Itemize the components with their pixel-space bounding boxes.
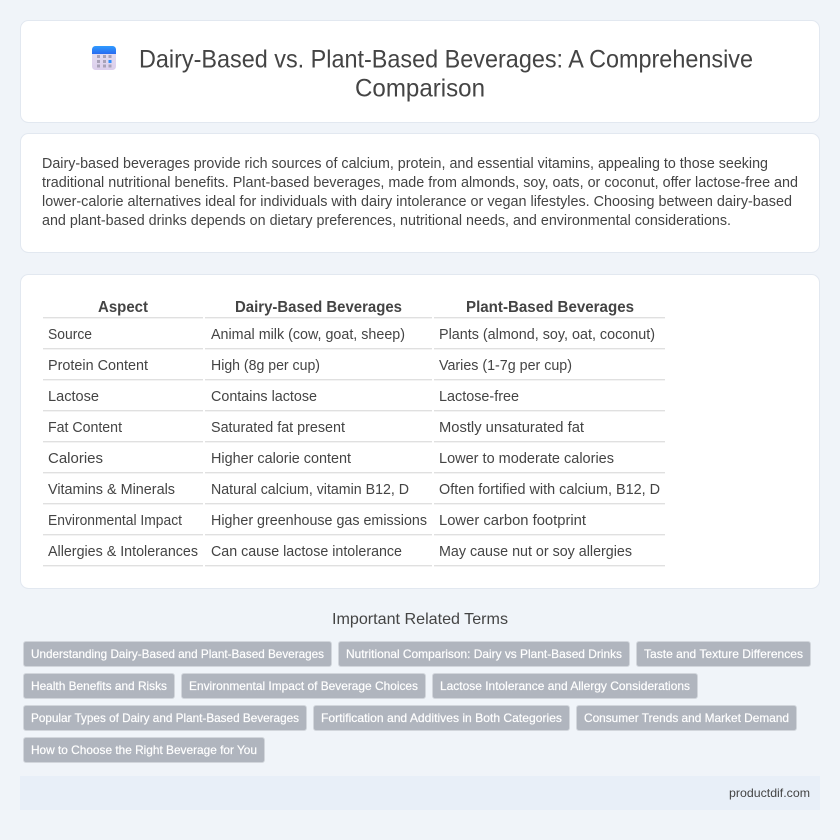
table header row bbox=[98, 299, 634, 316]
table row: protein content bbox=[48, 358, 572, 374]
table row: protein content: High (8g per cup) bbox=[211, 358, 320, 374]
tag: How to Choose the Right Beverage for You bbox=[31, 743, 257, 757]
table row: calories bbox=[48, 451, 614, 467]
table row: source bbox=[48, 327, 655, 343]
tag bbox=[432, 674, 698, 698]
table row: lactose bbox=[48, 389, 519, 405]
table row: fat content: Saturated fat present bbox=[211, 420, 345, 436]
tag: Taste and Texture Differences bbox=[644, 647, 803, 661]
table header row: Plant-Based Beverages bbox=[466, 299, 634, 316]
table header row: Aspect bbox=[98, 299, 149, 316]
table row: lactose: Contains lactose bbox=[211, 389, 317, 405]
table row: vitamins and minerals: Vitamins & Minerals bbox=[48, 482, 175, 498]
text block: introduction paragraph: Dairy-based beverages provide rich sources of calcium, protein, and essential vitamins, appealing to those seeking bbox=[42, 156, 768, 172]
table row: allergies and intolerances: Allergies & Intolerances bbox=[48, 544, 198, 560]
table row: protein content: Varies (1-7g per cup) bbox=[439, 358, 572, 374]
table row: fat content: Fat Content bbox=[48, 420, 122, 436]
table row: vitamins and minerals: Often fortified with calcium, B12, D bbox=[439, 482, 660, 498]
title: Comparison bbox=[355, 74, 485, 102]
title bbox=[139, 46, 753, 102]
table row: source: Animal milk (cow, goat, sheep) bbox=[211, 327, 405, 343]
tag: Consumer Trends and Market Demand bbox=[584, 711, 789, 725]
text block: introduction paragraph: lower-calorie alternatives ideal for individuals with dairy intolerance or vegan lifestyles. Choosing between dairy-based bbox=[42, 194, 792, 210]
table row: fat content bbox=[48, 420, 584, 436]
title: Dairy-Based vs. Plant-Based Beverages: A Comprehensive bbox=[139, 46, 753, 74]
tag bbox=[24, 642, 332, 666]
table row: calories: Higher calorie content bbox=[211, 451, 351, 467]
tag bbox=[24, 674, 174, 698]
text block: introduction paragraph bbox=[42, 156, 798, 229]
table row: calories: Calories bbox=[48, 451, 103, 467]
tag: Popular Types of Dairy and Plant-Based Beverages bbox=[31, 711, 299, 725]
table row: lactose: Lactose bbox=[48, 389, 99, 405]
table row: protein content: Protein Content bbox=[48, 358, 148, 374]
tag: Lactose Intolerance and Allergy Considerations bbox=[440, 679, 690, 693]
panel: related term tags bbox=[24, 642, 810, 762]
footer site name: productdif.com bbox=[729, 786, 810, 800]
tag: Environmental Impact of Beverage Choices bbox=[189, 679, 418, 693]
table row: fat content: Mostly unsaturated fat bbox=[439, 420, 584, 436]
icon: calendar bbox=[92, 46, 116, 70]
table row: calories: Lower to moderate calories bbox=[439, 451, 614, 467]
tag bbox=[636, 642, 810, 666]
tag: Fortification and Additives in Both Categories bbox=[321, 711, 562, 725]
table row: source: Source bbox=[48, 327, 92, 343]
table row: environmental impact: Higher greenhouse gas emissions bbox=[211, 513, 427, 529]
tag: Understanding Dairy-Based and Plant-Based Beverages bbox=[31, 647, 324, 661]
panel: comparison table bbox=[20, 274, 820, 588]
table row: vitamins and minerals bbox=[48, 482, 660, 498]
table row: environmental impact bbox=[48, 513, 586, 529]
table row: allergies and intolerances bbox=[48, 544, 632, 560]
panel: introduction bbox=[20, 134, 820, 252]
tag: Health Benefits and Risks bbox=[31, 679, 167, 693]
footer bbox=[20, 776, 820, 810]
tag bbox=[24, 706, 306, 730]
table row: source: Plants (almond, soy, oat, coconut) bbox=[439, 327, 655, 343]
tag bbox=[182, 674, 426, 698]
table row: environmental impact: Lower carbon footprint bbox=[439, 513, 586, 529]
text block: introduction paragraph: traditional nutritional benefits. Plant-based beverages, made from almonds, soy, oats, or coconut, offer lactose-free and bbox=[42, 175, 798, 191]
heading: important related terms: Important Related Terms bbox=[332, 611, 508, 628]
text block: introduction paragraph: and plant-based drinks depends on dietary preferences, nutritional needs, and environmental considerations. bbox=[42, 213, 731, 229]
tag bbox=[24, 738, 264, 762]
table row: lactose: Lactose-free bbox=[439, 389, 519, 405]
tag bbox=[314, 706, 570, 730]
tag bbox=[338, 642, 630, 666]
table row: environmental impact: Environmental Impact bbox=[48, 513, 182, 529]
tag: Nutritional Comparison: Dairy vs Plant-Based Drinks bbox=[346, 647, 622, 661]
table row: allergies and intolerances: May cause nut or soy allergies bbox=[439, 544, 632, 560]
tag bbox=[576, 706, 796, 730]
table row: vitamins and minerals: Natural calcium, vitamin B12, D bbox=[211, 482, 409, 498]
table row: allergies and intolerances: Can cause lactose intolerance bbox=[211, 544, 402, 560]
panel: header bbox=[20, 20, 820, 122]
table header row: Dairy-Based Beverages bbox=[235, 299, 402, 316]
